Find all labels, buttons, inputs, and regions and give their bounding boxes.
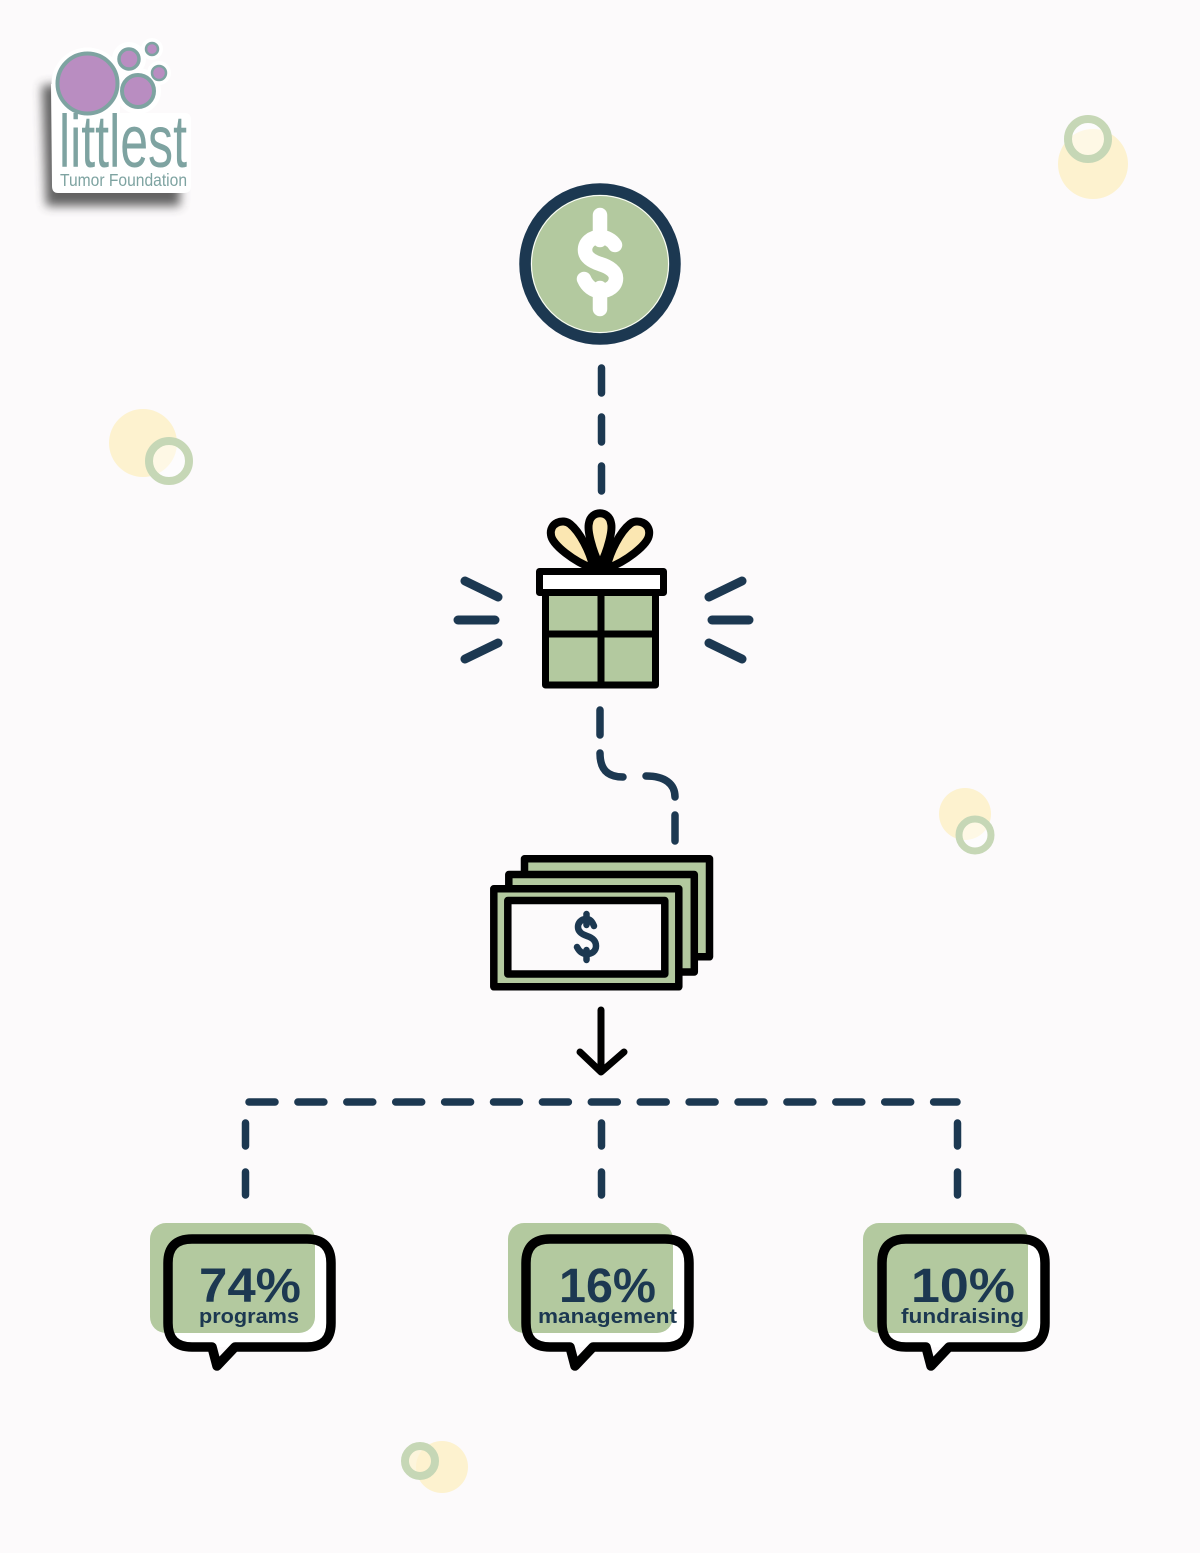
sparkle rays [458,581,749,659]
icon: stack of banknotes [494,859,710,987]
callout: 10% fundraising [863,1223,1045,1366]
icon: dollar coin [525,189,675,339]
callout: 16% management: management [538,1306,677,1328]
dashed connector: three-way split [246,1102,958,1195]
callout: 10% fundraising: fundraising [901,1306,1024,1328]
arrow: money down to split [580,1010,624,1072]
logo: Littlest Tumor Foundation: littlest [59,100,187,183]
callout: 74% programs: 74% [199,1260,301,1313]
gift box body [546,592,656,685]
decorative bubbles: left [109,409,189,481]
callout: 74% programs [150,1223,331,1366]
callout: 16% management: 16% [559,1260,656,1313]
icon: gift box [458,513,749,685]
gift box lid [540,572,664,592]
gift ribbon bow [551,513,649,568]
icon: small dollar sign [577,914,596,960]
dashed connector: coin to gift [598,368,605,491]
decorative bubbles: right [939,788,991,851]
decorative bubbles: bottom [405,1441,468,1493]
logo: Littlest Tumor Foundation [42,38,191,206]
decorative bubbles: top right [1058,119,1128,199]
callout: 16% management [508,1223,689,1366]
callout: 74% programs: programs [199,1306,299,1328]
logo: Littlest Tumor Foundation: Tumor Foundation [60,170,187,190]
callout: 10% fundraising: 10% [911,1260,1015,1313]
dashed connector: gift to money [600,710,675,841]
